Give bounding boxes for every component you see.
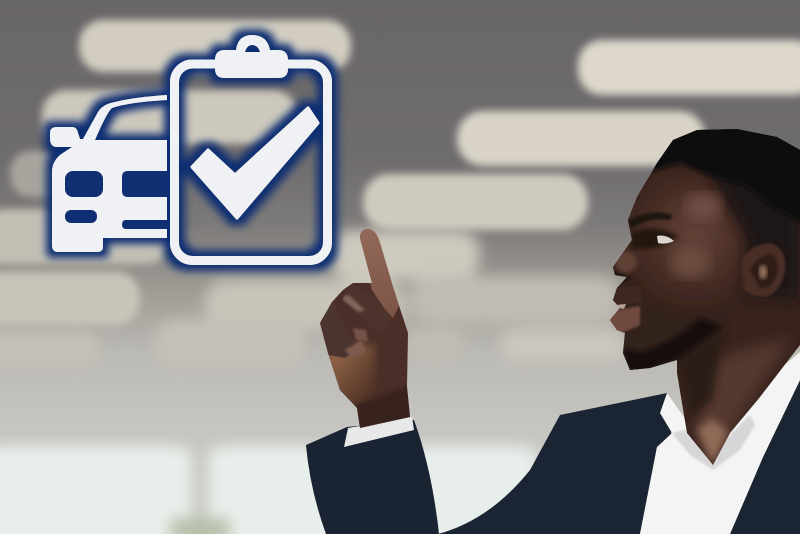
- man: neck shading: [690, 340, 790, 465]
- man: hair fade: [705, 176, 800, 306]
- man: shirt cuff: [344, 417, 414, 447]
- man: jacket and sleeve: [306, 352, 800, 534]
- man: teeth: [616, 304, 626, 309]
- man: pointing finger: [360, 229, 399, 318]
- icon: clipboard outline: [174, 64, 328, 260]
- man: eye: [657, 236, 674, 244]
- man: raised hand pointing: [320, 229, 410, 428]
- man: jacket right lapel: [730, 380, 800, 534]
- icon: check mark: [192, 108, 318, 218]
- man: face skin: [610, 174, 744, 368]
- man: eyebrow: [626, 213, 672, 228]
- man: ear: [742, 243, 785, 296]
- icon: car lights: [65, 171, 167, 229]
- man: sleeve: [306, 420, 439, 534]
- man: white shirt: [640, 352, 800, 534]
- man: eye socket: [630, 229, 678, 249]
- man: beard: [623, 318, 722, 372]
- man: palm: [325, 345, 375, 410]
- man: hair: [650, 125, 800, 225]
- man: upper lip: [613, 286, 641, 304]
- icon: car and clipboard checklist: [50, 35, 328, 260]
- man: head and neck: [600, 120, 800, 470]
- man: lower lip: [606, 306, 640, 334]
- man: wrist: [355, 385, 412, 430]
- man: curled fingers: [320, 300, 355, 358]
- man: jacket body: [438, 393, 672, 534]
- man: cheek highlight: [685, 193, 721, 221]
- man: nose: [615, 251, 637, 273]
- icon: car: [50, 95, 167, 252]
- icon: clipboard clip: [215, 35, 288, 78]
